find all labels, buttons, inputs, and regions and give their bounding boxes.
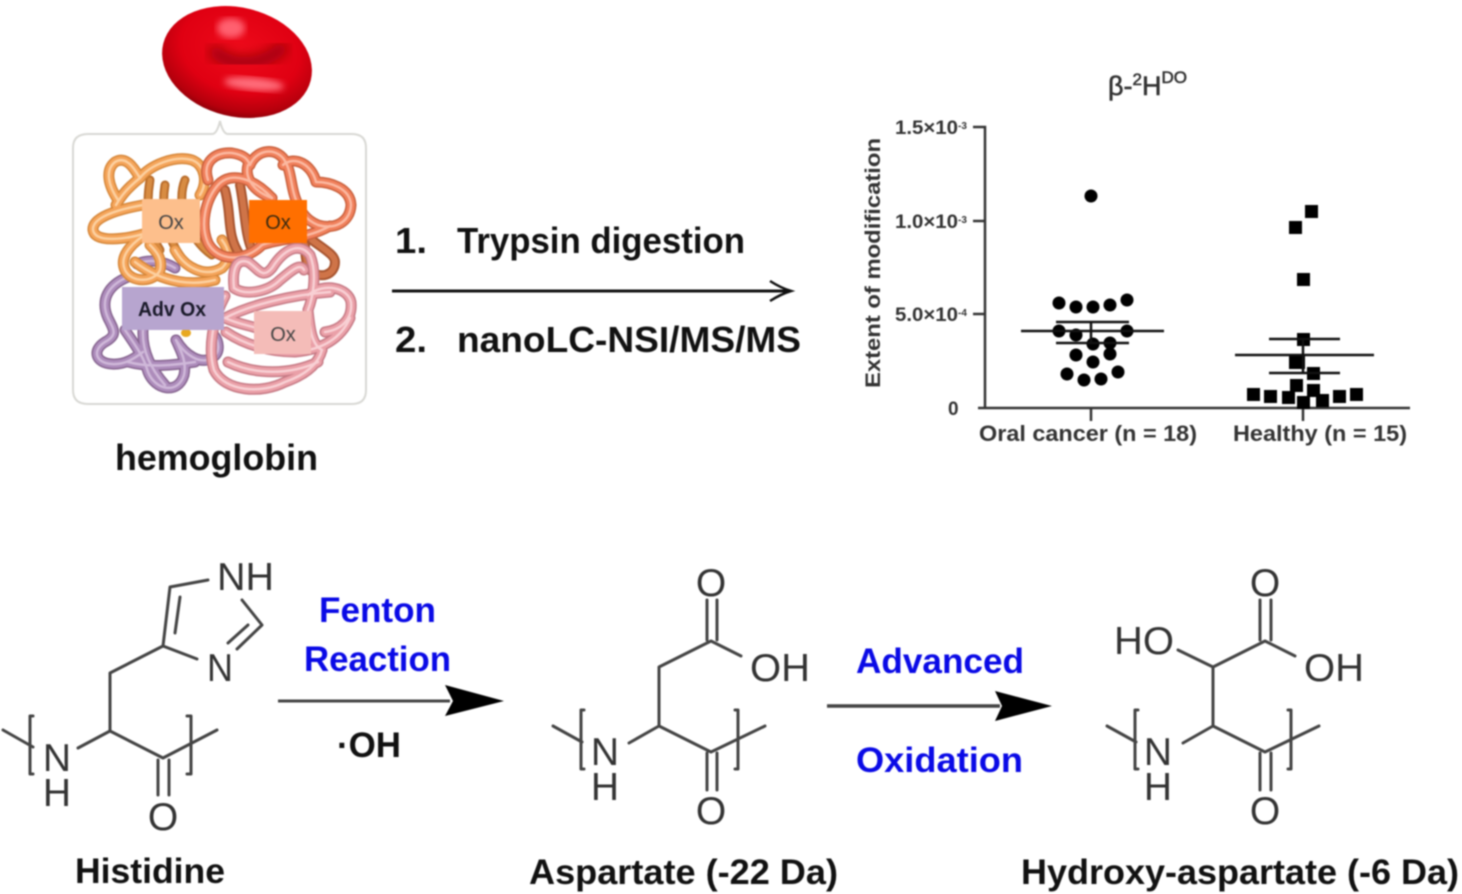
healthy points xyxy=(1247,205,1363,409)
label: Ox pink xyxy=(254,311,311,354)
panel: hemoglobin box xyxy=(73,121,366,404)
x labels xyxy=(979,421,1407,446)
y tick labels: 1.5×10 xyxy=(895,118,958,139)
structure: aspartate: H xyxy=(591,766,619,809)
structure: histidine: H xyxy=(43,772,71,815)
label: Hydroxy-aspartate: Hydroxy-aspartate (-6 Da) xyxy=(1021,853,1459,892)
structure: aspartate: O xyxy=(696,562,726,605)
step text: nanoLC: nanoLC-NSI/MS/MS xyxy=(457,319,801,360)
chart title: H xyxy=(1142,71,1162,101)
label: hemoglobin: hemoglobin xyxy=(115,437,318,478)
structure: hydroxy-aspartate: N xyxy=(1144,731,1172,774)
icon: red blood cell xyxy=(150,0,324,133)
healthy mean and error bars xyxy=(1235,339,1374,373)
label: Ox light orange: Ox xyxy=(158,212,184,234)
step text: nanoLC: 2. xyxy=(395,319,427,360)
oral cancer mean and error bars xyxy=(1021,322,1164,343)
structure: hydroxy-aspartate: H xyxy=(1144,766,1172,809)
chart title: 2 xyxy=(1133,70,1142,89)
structure: aspartate: OH xyxy=(750,647,810,690)
y tick labels xyxy=(895,118,967,420)
tube: purple subunit xyxy=(97,261,218,388)
y tick labels: 0 xyxy=(948,399,959,420)
label: Adv Ox xyxy=(122,287,224,330)
y tick labels: -3 xyxy=(958,121,967,132)
y tick labels: -3 xyxy=(958,215,967,226)
structure: histidine: N xyxy=(207,647,233,690)
oral cancer points xyxy=(1052,190,1134,386)
label: Advanced Oxidation: Advanced xyxy=(856,642,1024,681)
label: Histidine: Histidine xyxy=(75,852,225,891)
arrow: workflow xyxy=(392,281,791,301)
structure: hydroxy-aspartate: HO xyxy=(1114,620,1174,663)
structure: hydroxy-aspartate xyxy=(1107,562,1364,833)
x labels: Healthy (n = 15) xyxy=(1233,421,1407,446)
y tick labels: -4 xyxy=(958,308,967,319)
x labels: Oral cancer (n = 18) xyxy=(979,421,1197,446)
y axis label: Extent of modification xyxy=(862,138,885,388)
label: Fenton Reaction xyxy=(304,591,451,679)
label: Fenton Reaction: Fenton xyxy=(319,591,436,630)
icon: heme spot xyxy=(181,329,191,337)
label: Advanced Oxidation: Oxidation xyxy=(856,741,1023,780)
y tick labels: 5.0×10 xyxy=(895,305,958,326)
label: Fenton Reaction: Reaction xyxy=(304,640,451,679)
step text: trypsin digestion: Trypsin digestion xyxy=(457,220,745,261)
tube: red-orange subunit xyxy=(204,152,351,275)
scatter chart xyxy=(862,118,1410,446)
structure: histidine: NH xyxy=(217,556,274,599)
label: Adv Ox: Adv Ox xyxy=(138,299,206,321)
structure: hydroxy-aspartate: O xyxy=(1250,562,1280,605)
arrow: advanced oxidation xyxy=(827,691,1052,721)
structure: histidine: O xyxy=(148,796,178,839)
structure: aspartate xyxy=(553,562,810,833)
label: hydroxyl radical: ·OH xyxy=(337,726,401,765)
structure: hydroxy-aspartate: OH xyxy=(1304,647,1364,690)
y tick labels: 1.0×10 xyxy=(895,212,958,233)
label: Ox light orange xyxy=(142,199,200,243)
arrow: Fenton reaction xyxy=(278,685,504,716)
structure: hydroxy-aspartate: O xyxy=(1250,790,1280,833)
structure: histidine: N xyxy=(43,737,71,780)
label: Ox pink: Ox xyxy=(270,324,296,346)
step text: trypsin digestion: 1. xyxy=(395,220,427,261)
structure: histidine xyxy=(3,556,274,839)
structure: aspartate: O xyxy=(696,790,726,833)
chart title: β- xyxy=(1108,71,1133,101)
label: Advanced Oxidation xyxy=(856,642,1024,780)
tube: pink subunit xyxy=(211,248,351,389)
axes xyxy=(973,127,1410,421)
chart title: DO xyxy=(1162,68,1187,87)
tube: orange subunit xyxy=(93,159,228,283)
label: Ox dark orange xyxy=(249,200,307,243)
label: Aspartate: Aspartate (-22 Da) xyxy=(529,853,838,892)
label: Ox dark orange: Ox xyxy=(265,212,291,234)
structure: aspartate: N xyxy=(591,731,619,774)
